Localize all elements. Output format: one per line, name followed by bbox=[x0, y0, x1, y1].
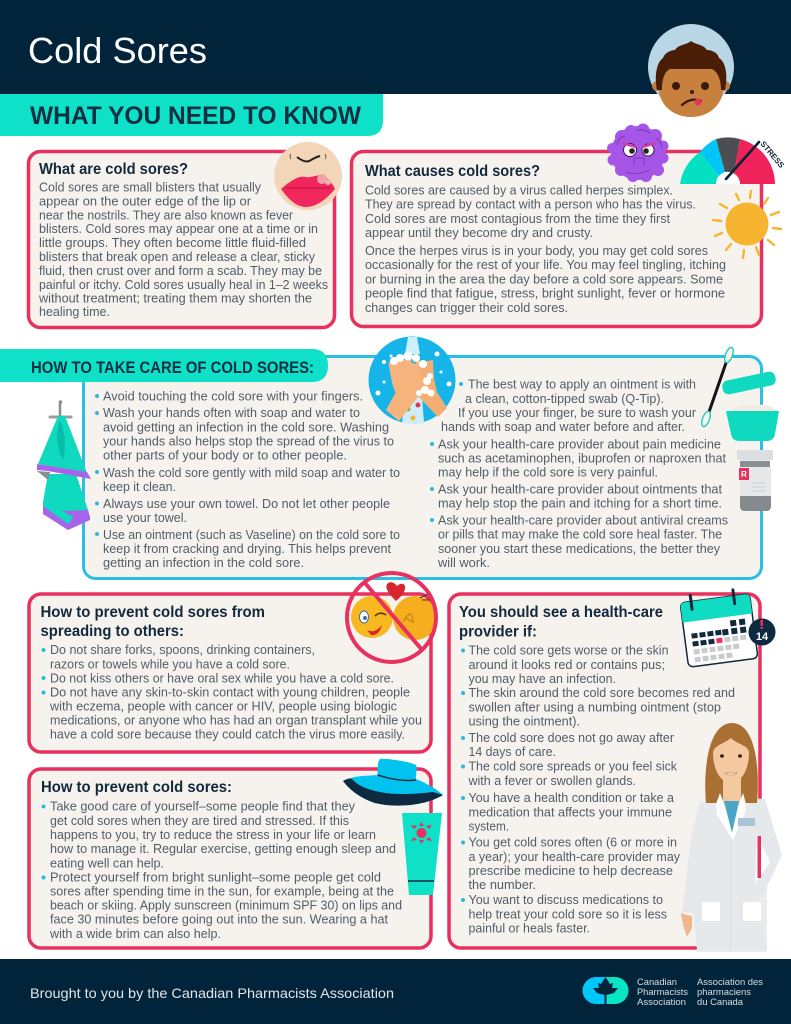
text block: see a provider list: The skin around the cold sore becomes red and bbox=[468, 685, 735, 700]
text block: what are cold sores: Cold sores are small blisters that usually bbox=[39, 180, 261, 194]
text block: care list left: Avoid touching the cold sore with your fingers. bbox=[103, 388, 363, 404]
text block: care list right: a clean, cotton-tipped swab (Q-Tip). bbox=[465, 391, 664, 406]
icon: ointment jar bbox=[721, 371, 779, 441]
text block: what causes cold sores: Cold sores are caused by a virus called herpes simplex. bbox=[365, 182, 673, 198]
footer banner bbox=[0, 959, 791, 1024]
section heading: what you need to know: WHAT YOU NEED TO KNOW bbox=[30, 102, 361, 130]
text block: prevent cold sores list bbox=[42, 798, 402, 941]
text block: what are cold sores: near the nostrils. They are also known as fever bbox=[39, 208, 294, 222]
text block: care list left: Always use your own towel. Do not let other people bbox=[103, 496, 390, 511]
text block: what are cold sores: fluid, then crust over and form a scab. They may be bbox=[39, 263, 322, 278]
heading: prevent spreading: How to prevent cold sores from bbox=[40, 604, 265, 621]
text block: see a provider list: system. bbox=[468, 818, 509, 834]
text block: prevent cold sores list: Protect yourself from bright sunlight–some people get cold bbox=[50, 870, 381, 884]
text block: see a provider list: using the ointment). bbox=[468, 714, 580, 728]
logo: Canadian Pharmacists Association: Pharmacists bbox=[637, 987, 688, 998]
text block: see a provider list: painful or heals faster. bbox=[468, 920, 590, 936]
text block: what are cold sores: healing time. bbox=[39, 304, 110, 319]
logo: Canadian Pharmacists Association: Canadian bbox=[637, 977, 677, 988]
heading: prevent cold sores: How to prevent cold sores: bbox=[41, 779, 232, 796]
section heading: what you need to know bbox=[0, 94, 383, 136]
text block: see a provider list: swollen after using a numbing ointment (stop bbox=[468, 700, 721, 714]
text block: prevent cold sores list: face 30 minutes before going out into the sun. Wearing a hat bbox=[50, 912, 388, 926]
text block: prevent spreading list: Do not share forks, spoons, drinking containers, bbox=[50, 642, 315, 657]
logo: Canadian Pharmacists Association: Association bbox=[637, 997, 686, 1008]
text block: care list left: getting an infection in the cold sore. bbox=[103, 555, 304, 570]
top banner bbox=[0, 0, 791, 94]
text block: care list left: Wash the cold sore gently with mild soap and water to bbox=[103, 465, 400, 480]
logo: Canadian Pharmacists Association bbox=[582, 977, 763, 1008]
text block: care list right: sooner you start these medications, the better they bbox=[438, 541, 720, 556]
text block: what causes cold sores bbox=[365, 182, 726, 315]
text block: what causes cold sores: changes can trigger their cold sores. bbox=[365, 300, 568, 315]
text block: care list left: other parts of your body or to other people. bbox=[103, 448, 347, 462]
icon: stress gauge: STRESS bbox=[758, 140, 786, 170]
text block: what are cold sores: appear on the outer edge of the lip or bbox=[39, 194, 252, 208]
text block: see a provider list: prescribe medicine to help decrease bbox=[468, 863, 673, 878]
icon: calendar: 14 bbox=[756, 631, 769, 643]
text block: see a provider list: you may have an infection. bbox=[468, 671, 616, 686]
text block: what are cold sores: painful or itchy. Cold sores usually heal in 1–2 weeks bbox=[39, 277, 328, 292]
icon: pharmacist bbox=[681, 723, 782, 952]
text block: prevent spreading list: razors or towels while you have a cold sore. bbox=[50, 656, 290, 672]
text block: see a provider list: the number. bbox=[468, 877, 536, 892]
text block: care list left: use your towel. bbox=[103, 510, 187, 525]
logo: Canadian Pharmacists Association: Association des bbox=[697, 977, 763, 988]
text block: what causes cold sores: Cold sores are most contagious from the time they first bbox=[365, 211, 670, 226]
icon: towel on hook bbox=[37, 400, 91, 530]
text block: prevent spreading list: have a cold sore because they could catch the virus more easily. bbox=[50, 726, 405, 742]
heading: see a provider bbox=[459, 604, 663, 640]
text block: care list left: keep it clean. bbox=[103, 479, 176, 494]
text block: prevent cold sores list: with a wide brim can also help. bbox=[49, 926, 221, 941]
text block: prevent cold sores list: happens to you, try to reduce the stress in your life or learn bbox=[50, 827, 376, 842]
text block: prevent spreading list: Do not have any skin-to-skin contact with young children, people bbox=[50, 684, 410, 700]
text block: see a provider list: You have a health condition or take a bbox=[468, 790, 675, 805]
text block: prevent cold sores list: beach or skiing. Apply sunscreen (minimum SPF 30) on lips and bbox=[50, 898, 402, 912]
text block: see a provider list: You want to discuss medications to bbox=[468, 892, 663, 907]
top banner: Cold Sores bbox=[28, 30, 207, 71]
panel: how to take care of cold sores bbox=[0, 336, 779, 578]
panel: prevent cold sores bbox=[29, 759, 443, 948]
icon: lips with cold sore bbox=[274, 142, 342, 210]
text block: prevent cold sores list: how to manage it. Regular exercise, getting enough sleep and bbox=[50, 841, 396, 856]
text block: prevent spreading list: medications, or anyone who has had an organ transplant while you bbox=[50, 712, 422, 728]
icon: calendar bbox=[679, 588, 776, 667]
text block: care list right: Ask your health-care provider about ointments that bbox=[438, 482, 722, 496]
footer banner: Brought to you by the Canadian Pharmacists Association bbox=[30, 985, 394, 1001]
text block: care list right: Ask your health-care provider about antiviral creams bbox=[438, 512, 728, 528]
panel: prevent spreading to others bbox=[29, 573, 437, 752]
text block: prevent cold sores list: sores after spending time in the sun, for example, being at the bbox=[50, 884, 394, 898]
text block: what are cold sores: without treatment; treating them may shorten the bbox=[38, 290, 312, 306]
text block: care list left: keep it from cracking and drying. This helps prevent bbox=[103, 541, 391, 556]
logo: Canadian Pharmacists Association: pharmaciens bbox=[697, 987, 751, 998]
panel: see a health-care provider bbox=[449, 588, 782, 952]
text block: care list left bbox=[95, 388, 400, 570]
heading: what are cold sores: What are cold sores? bbox=[39, 161, 188, 178]
text block: see a provider list: around it looks red or contains pus; bbox=[468, 657, 665, 672]
icon: sun hat bbox=[343, 759, 443, 806]
heading: prevent spreading bbox=[40, 604, 265, 640]
text block: prevent cold sores list: Take good care of yourself–some people find that they bbox=[50, 798, 355, 814]
heading: see a provider: You should see a health-care bbox=[459, 604, 663, 621]
text block: care list right: The best way to apply an ointment is with bbox=[468, 376, 696, 392]
heading: how to take care: HOW TO TAKE CARE OF COLD SORES: bbox=[31, 358, 314, 377]
text block: prevent spreading list: Do not kiss others or have oral sex while you have a cold sore. bbox=[50, 670, 394, 686]
text block: see a provider list: You get cold sores often (6 or more in bbox=[468, 834, 677, 850]
text block: care list right: such as acetaminophen, ibuprofen or naproxen that bbox=[438, 450, 726, 466]
text block: prevent cold sores list: get cold sores when they are tired and stressed. If this bbox=[50, 813, 349, 828]
text block: care list left: avoid getting an infection in the cold sore. Washing bbox=[103, 420, 389, 434]
icon: boy with cold sore bbox=[648, 24, 734, 117]
text block: care list right bbox=[430, 376, 728, 570]
heading: what causes cold sores: What causes cold sores? bbox=[365, 163, 540, 180]
icon: no kissing bbox=[347, 573, 437, 662]
text block: see a provider list: with a fever or swollen glands. bbox=[468, 773, 636, 788]
text block: see a provider list: The cold sore does not go away after bbox=[468, 730, 675, 745]
text block: see a provider list bbox=[461, 642, 735, 936]
text block: see a provider list: The cold sore spreads or you feel sick bbox=[468, 758, 677, 774]
text block: care list right: will work. bbox=[437, 555, 490, 570]
panel: what are cold sores bbox=[28, 142, 342, 328]
text block: care list left: your hands also helps stop the spread of the virus to bbox=[103, 434, 394, 448]
text block: care list left: Use an ointment (such as Vaseline) on the cold sore to bbox=[103, 527, 400, 542]
text block: what causes cold sores: or burning in the area the day before a cold sore appears. Some bbox=[365, 272, 723, 286]
icon: cotton swab bbox=[700, 346, 735, 428]
text block: what causes cold sores: occasionally for the rest of your life. You may feel tingling, itching bbox=[365, 257, 726, 272]
icon: angry purple virus bbox=[607, 124, 668, 182]
text block: what causes cold sores: Once the herpes virus is in your body, you may get cold sores bbox=[365, 243, 708, 258]
heading: see a provider: provider if: bbox=[459, 624, 537, 640]
icon: hand washing bbox=[368, 336, 456, 424]
heading: how to take care bbox=[0, 349, 328, 382]
text block: care list right: If you use your finger, be sure to wash your bbox=[458, 405, 697, 420]
text block: care list right: or pills that may make the cold sore heal faster. The bbox=[438, 526, 722, 542]
text block: see a provider list: medication that affects your immune bbox=[468, 804, 672, 820]
text block: see a provider list: The cold sore gets worse or the skin bbox=[468, 642, 668, 658]
text block: what are cold sores: blisters. Cold sores may appear one at a time or in bbox=[39, 221, 318, 236]
text block: care list right: may help stop the pain and itching for a short time. bbox=[438, 496, 722, 510]
text block: care list left: Wash your hands often with soap and water to bbox=[103, 405, 360, 420]
icon: stress gauge bbox=[680, 137, 786, 184]
icon: prescription bottle bbox=[737, 450, 773, 511]
text block: see a provider list: a year); your health-care provider may bbox=[468, 849, 680, 864]
text block: prevent spreading list bbox=[42, 642, 422, 742]
text block: what are cold sores: blisters that break open and release a clear, sticky bbox=[39, 249, 315, 264]
icon: sun bbox=[713, 191, 781, 258]
panel: what causes cold sores bbox=[352, 124, 786, 326]
text block: what causes cold sores: people find that fatigue, stress, bright sunlight, fever or hormone bbox=[365, 286, 725, 300]
text block: what causes cold sores: They are spread by contact with a person who has the virus. bbox=[365, 196, 696, 212]
text block: care list right: hands with soap and water before and after. bbox=[441, 419, 685, 434]
icon: sunscreen tube bbox=[402, 813, 442, 895]
logo: Canadian Pharmacists Association: du Canada bbox=[697, 997, 744, 1008]
text block: what are cold sores: little groups. They often become little fluid-filled bbox=[39, 235, 306, 250]
heading: prevent spreading: spreading to others: bbox=[40, 623, 184, 640]
text block: see a provider list: help treat your cold sore so it is less bbox=[468, 906, 667, 922]
icon: prescription bottle: R bbox=[741, 470, 747, 479]
text block: care list right: may help if the cold sore is very painful. bbox=[438, 464, 658, 480]
text block: what are cold sores bbox=[38, 180, 328, 319]
text block: prevent spreading list: with eczema, people with cancer or HIV, people using biologic bbox=[49, 698, 397, 714]
text block: prevent cold sores list: eating well can help. bbox=[50, 856, 164, 870]
text block: see a provider list: 14 days of care. bbox=[468, 744, 556, 759]
text block: care list right: Ask your health-care provider about pain medicine bbox=[438, 436, 721, 452]
text block: what causes cold sores: appear until they become dry and crusty. bbox=[365, 225, 593, 240]
